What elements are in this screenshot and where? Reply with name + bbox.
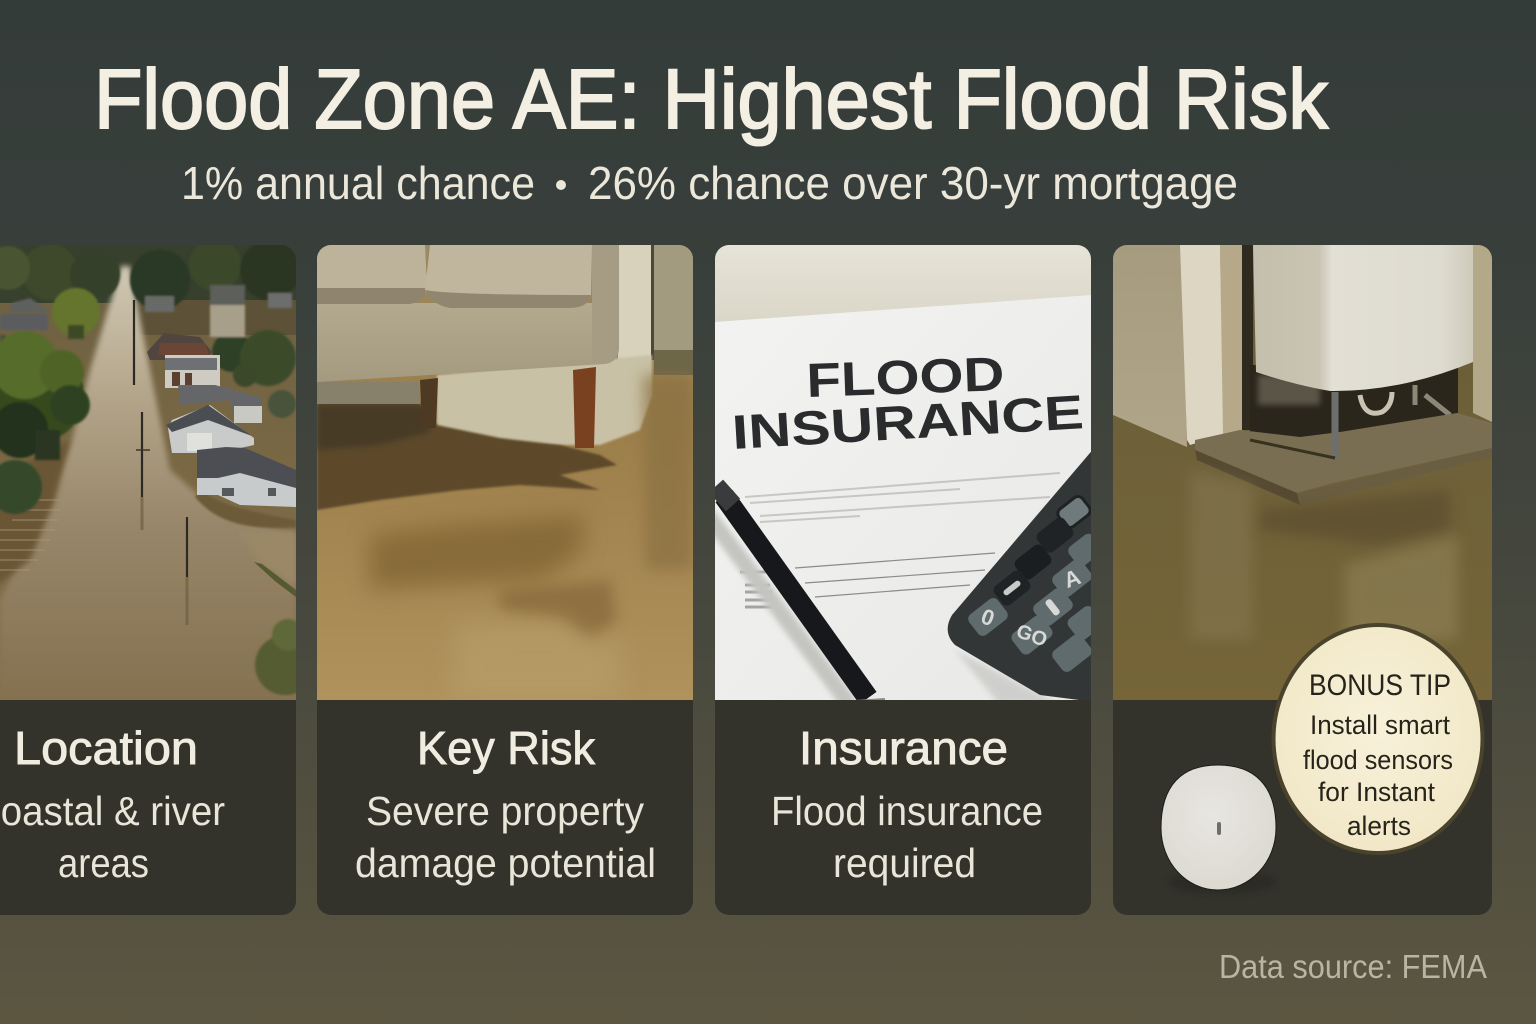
photo: water heater in flooded basement xyxy=(1113,245,1492,700)
callout: bonus tip badge: BONUS TIP xyxy=(1309,669,1451,702)
photo: flood insurance document with pen and calculator xyxy=(708,245,1105,705)
text block: insurance xyxy=(715,700,1091,915)
callout: bonus tip badge: Install smart xyxy=(1310,710,1450,740)
photo: flooded street aerial view xyxy=(0,239,315,700)
callout: bonus tip badge: alerts xyxy=(1347,811,1411,841)
text block: key risk: damage potential xyxy=(355,840,656,886)
callout: bonus tip badge: flood sensors xyxy=(1303,745,1453,775)
text block: location: Location xyxy=(14,722,198,774)
callout: bonus tip badge: for Instant xyxy=(1318,777,1435,807)
icon: flood sensor device xyxy=(1161,765,1276,894)
text block: location xyxy=(0,700,296,915)
card base xyxy=(1113,700,1492,915)
callout: bonus tip badge xyxy=(1274,625,1482,853)
subtitle xyxy=(181,157,1238,209)
subtitle: 1% annual chance xyxy=(181,157,535,209)
subtitle: 26% chance over 30-yr mortgage xyxy=(588,157,1238,209)
panel: insurance xyxy=(708,245,1105,915)
panel: bonus tip xyxy=(1113,245,1492,915)
data source note: Data source: FEMA xyxy=(1219,948,1487,985)
photo: sofa in floodwater xyxy=(317,245,693,700)
photo: flood insurance document with pen and calculator: FLOOD xyxy=(806,348,1005,408)
panel: location xyxy=(0,239,315,915)
panel: key risk xyxy=(317,245,693,915)
text block: insurance: required xyxy=(833,840,976,886)
calculator xyxy=(959,652,1052,700)
photo: flood insurance document with pen and calculator: A xyxy=(1060,564,1084,593)
photo: flood insurance document with pen and calculator: 0 xyxy=(978,604,998,631)
text block: location: areas xyxy=(58,840,149,886)
photo: flood insurance document with pen and calculator: GO xyxy=(1013,620,1050,652)
title: Flood Zone AE: Highest Flood Risk xyxy=(94,52,1329,146)
photo: flood insurance document with pen and calculator: INSURANCE xyxy=(731,386,1085,460)
pen xyxy=(708,515,850,705)
text block: insurance: Insurance xyxy=(799,722,1008,774)
text block: key risk: Key Risk xyxy=(417,722,596,774)
text block: key risk: Severe property xyxy=(366,788,644,834)
text block: key risk xyxy=(317,700,693,915)
text block: insurance: Flood insurance xyxy=(771,788,1043,834)
